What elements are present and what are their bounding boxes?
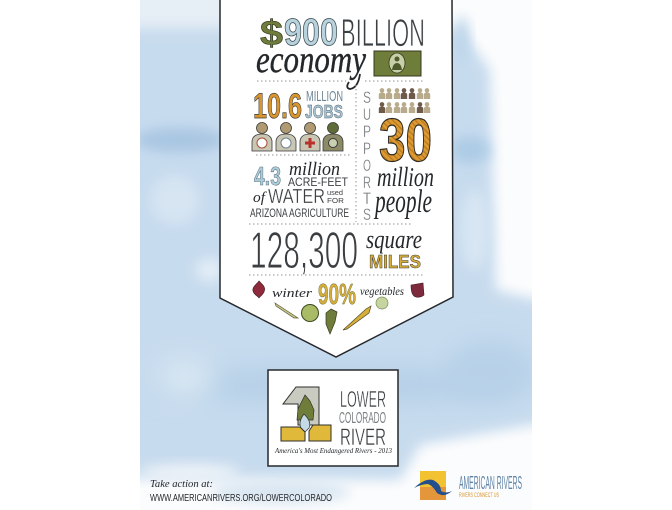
stat: winter 90% vegetables <box>272 279 404 311</box>
icon: beet right <box>411 283 424 297</box>
icon: leafy green <box>326 309 337 334</box>
stat: 10.6 million jobs: MILLION <box>306 88 343 105</box>
stat: 30 million people <box>374 107 434 220</box>
vertical label: supports: P <box>363 122 371 141</box>
headline: $900 billion economy: $ <box>260 14 283 53</box>
stat: 4.3 million acre-feet of water: ACRE-FEET <box>288 175 349 189</box>
stat: 4.3 million acre-feet of water: million <box>289 159 340 180</box>
stat: winter 90% vegetables: winter <box>272 285 313 300</box>
call to action <box>150 479 332 504</box>
stat: 4.3 million acre-feet of water: of <box>253 190 267 206</box>
stat: 128,300 square miles: 128,300 <box>250 222 358 280</box>
vertical label: supports: P <box>363 139 371 158</box>
logo panel: lower colorado river: LOWER <box>340 386 386 412</box>
vertical label: supports: S <box>363 88 371 107</box>
logo panel: lower colorado river: COLORADO <box>339 410 386 427</box>
headline: $900 billion economy: economy <box>256 39 366 81</box>
stat: 128,300 square miles: MILES <box>369 252 421 272</box>
icon: beet left <box>253 281 265 298</box>
stat: 128,300 square miles: square <box>366 225 422 254</box>
logo panel: lower colorado river: America's Most Endangered Rivers - 2013 <box>274 447 392 455</box>
watercolor background <box>140 0 532 510</box>
icon: dollar bill <box>374 51 421 76</box>
icon: carrot left <box>275 303 298 318</box>
vertical label: supports: U <box>363 105 371 124</box>
stat: 30 million people: million <box>377 162 434 192</box>
logo: american rivers <box>414 471 522 500</box>
stat: 30 million people: people <box>374 184 432 220</box>
stat: 4.3 million acre-feet of water: FOR <box>327 198 344 205</box>
call to action: WWW.AMERICANRIVERS.ORG/LOWERCOLORADO <box>150 493 332 504</box>
headline: $900 billion economy: BILLION <box>341 12 425 55</box>
stat: 4.3 million acre-feet of water: 4.3 <box>254 161 281 191</box>
stat: winter 90% vegetables: 90% <box>318 279 356 311</box>
vertical label: supports <box>363 88 371 224</box>
stat: 4.3 million acre-feet of water: used <box>327 190 343 197</box>
icons: small people grid <box>379 88 430 113</box>
icons: four workers <box>252 122 343 151</box>
banner <box>220 0 453 357</box>
stat: winter 90% vegetables: vegetables <box>360 284 404 298</box>
headline: $900 billion economy <box>256 12 425 89</box>
vertical label: supports: T <box>363 189 371 208</box>
icon: number one <box>281 387 331 441</box>
icon: cabbage <box>302 304 318 322</box>
vertical label: supports: O <box>363 156 371 175</box>
text: AMERICAN RIVERS <box>459 473 522 493</box>
stat: 4.3 million acre-feet of water <box>250 159 349 220</box>
stat: 10.6 million jobs: JOBS <box>305 102 343 122</box>
icon: carrot right <box>343 306 371 330</box>
stat: 4.3 million acre-feet of water: WATER <box>268 186 325 208</box>
headline: $900 billion economy: 900 <box>284 12 338 54</box>
logo panel: lower colorado river: RIVER <box>340 424 386 451</box>
vertical label: supports: S <box>363 205 371 224</box>
stat: 4.3 million acre-feet of water: ARIZONA AGRICULTURE <box>250 206 349 220</box>
vertical label: supports: R <box>363 173 371 192</box>
icon: round vegetable <box>376 297 388 309</box>
logo: american rivers: RIVERS CONNECT US <box>459 492 499 499</box>
stat: 10.6 million jobs: 10.6 <box>253 87 302 126</box>
stat: 30 million people: 30 <box>379 107 432 174</box>
call to action: Take action at: <box>150 479 213 490</box>
dotted dividers <box>249 81 425 275</box>
logo panel: lower colorado river <box>268 370 398 466</box>
